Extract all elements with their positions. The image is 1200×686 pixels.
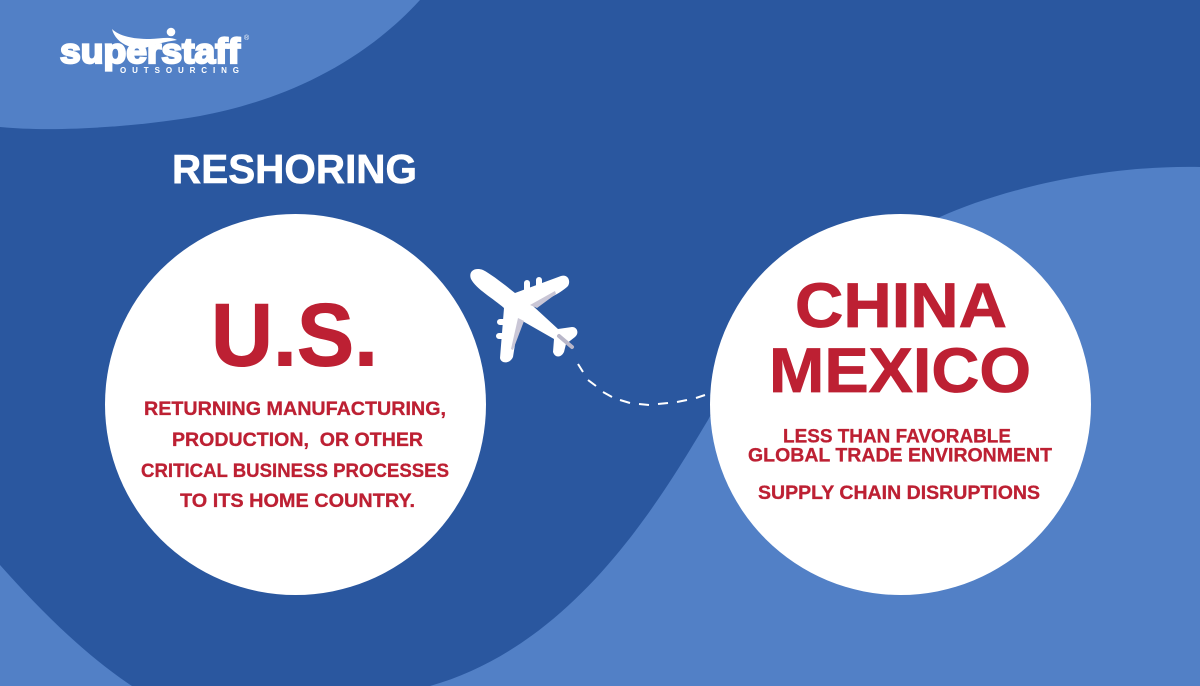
heading: China Mexico: MEXICO (769, 336, 1031, 406)
text block: definition: TO ITS HOME COUNTRY. (180, 490, 415, 512)
plane wing shadows (530, 291, 556, 308)
logo wordmark: superstaff (60, 32, 240, 71)
heading: China Mexico (769, 271, 1031, 406)
logo dot (167, 28, 175, 36)
title: RESHORING (172, 146, 417, 192)
text block: reasons: GLOBAL TRADE ENVIRONMENT (748, 444, 1052, 466)
logo (60, 28, 250, 75)
text block: definition: CRITICAL BUSINESS PROCESSES (141, 460, 449, 482)
heading: China Mexico: CHINA (795, 271, 1007, 341)
plane body (470, 269, 577, 362)
background wave: top left (0, 0, 420, 129)
text block: reasons: LESS THAN FAVORABLE (783, 426, 1011, 448)
text block: reasons: SUPPLY CHAIN DISRUPTIONS (758, 482, 1040, 504)
heading: U.S.: U.S. (211, 284, 378, 384)
logo registered mark: ® (244, 34, 250, 42)
text block: definition: RETURNING MANUFACTURING, (144, 398, 446, 420)
text block: reasons (748, 426, 1052, 504)
plane tail accent (559, 336, 572, 347)
dashed flight path (578, 364, 705, 405)
logo subline: OUTSOURCING (120, 66, 239, 75)
text block: definition (141, 398, 449, 512)
background wave: right (430, 167, 1200, 686)
text block: definition: PRODUCTION, OR OTHER (172, 429, 423, 451)
logo swoosh (112, 29, 177, 48)
background wave: bottom left (0, 565, 132, 686)
icon: airplane (470, 269, 577, 362)
panel: China Mexico circle (710, 214, 1091, 595)
plane engines (499, 280, 539, 336)
panel: U.S. circle (105, 214, 486, 595)
